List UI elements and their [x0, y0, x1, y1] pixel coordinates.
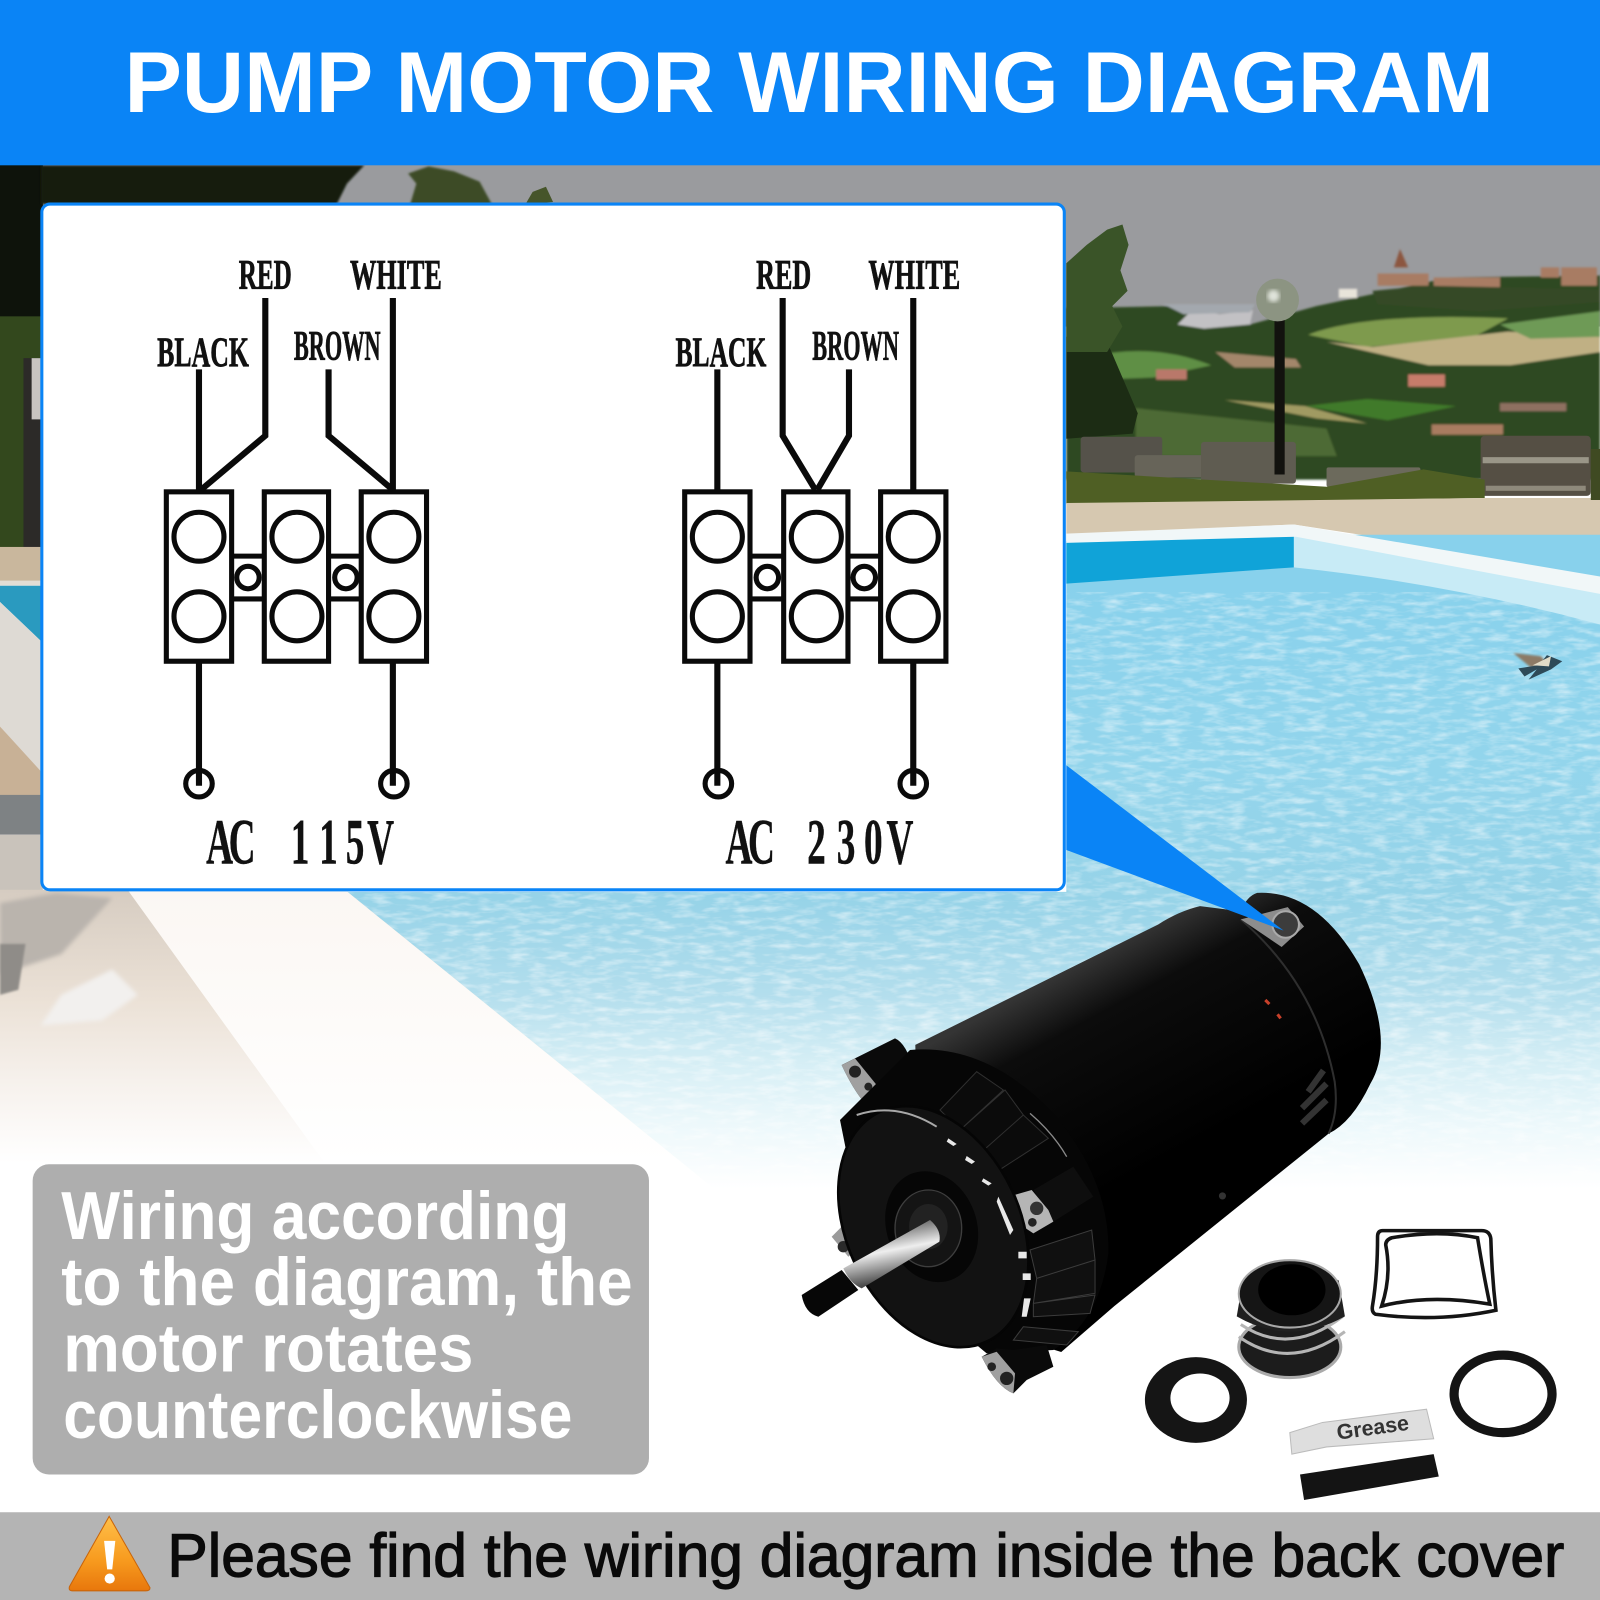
diagram: AC 115V: WHITE	[350, 253, 442, 299]
footer bar	[0, 1512, 1600, 1600]
callout wedge	[1066, 765, 1284, 931]
shaft seal	[1237, 1260, 1345, 1378]
grease tube: Grease	[1335, 1411, 1410, 1445]
diagram: AC 115V	[157, 253, 442, 878]
pool wall and coping	[1066, 524, 1600, 624]
left seal ring	[1145, 1357, 1247, 1443]
motor body	[915, 893, 1381, 1352]
pool water	[345, 535, 1600, 1194]
end cap seam	[1241, 919, 1336, 1134]
right tree	[1066, 224, 1138, 439]
under-panel deck	[0, 890, 720, 1194]
planters	[1081, 436, 1591, 496]
diagram: AC 230V: RED	[756, 253, 811, 299]
diagram: AC 230V	[676, 253, 960, 878]
diagram: AC 230V: AC 230V	[726, 807, 913, 878]
pump motor photo	[801, 893, 1381, 1393]
callout: rotation note	[33, 1164, 649, 1474]
callout: rotation note: to the diagram, the	[61, 1245, 633, 1320]
black bar	[1300, 1454, 1439, 1500]
cooling fins	[940, 1072, 1095, 1345]
background: pool scene	[0, 165, 1600, 1160]
grease tube	[1290, 1409, 1434, 1454]
distant hills and fields	[1066, 249, 1600, 480]
front end of motor	[801, 1038, 1108, 1393]
callout: rotation note: counterclockwise	[63, 1378, 572, 1453]
callout: rotation note: Wiring according	[61, 1179, 569, 1254]
lawn strip	[1066, 469, 1485, 504]
footer text: Please find the wiring diagram inside the back cover	[167, 1522, 1564, 1590]
side ear	[1008, 1167, 1093, 1233]
flange	[840, 1049, 1108, 1353]
lamp post	[1256, 279, 1299, 474]
right gasket	[1454, 1355, 1552, 1433]
header banner	[0, 0, 1600, 165]
icon: warning triangle	[69, 1516, 150, 1591]
callout: rotation note: motor rotates	[63, 1311, 473, 1386]
front disc	[801, 1075, 1065, 1378]
shaft	[802, 1220, 940, 1317]
bottom ear	[982, 1345, 1053, 1393]
body screw	[1219, 1192, 1226, 1199]
sky	[0, 163, 1600, 327]
diagram: AC 230V: BLACK	[676, 330, 767, 376]
diagram: AC 115V: BLACK	[157, 330, 249, 376]
diagram: AC 115V: RED	[239, 253, 292, 299]
bird	[1513, 653, 1562, 680]
left ear	[832, 1225, 858, 1257]
diagram: AC 230V: WHITE	[868, 253, 960, 299]
panel: wiring diagrams	[42, 204, 1064, 890]
square o-rings	[1372, 1231, 1496, 1318]
seal kit	[1145, 1231, 1552, 1500]
terminal port	[1241, 907, 1304, 947]
diagram: AC 115V: BROWN	[294, 324, 381, 370]
left trees and lawn	[0, 163, 553, 552]
left deck and pool corner	[0, 547, 43, 892]
indicator glints	[1265, 1000, 1281, 1018]
right deck	[1066, 498, 1600, 571]
diagram: AC 230V: BROWN	[812, 324, 899, 370]
diagram: AC 115V: AC 115V	[206, 807, 394, 878]
vent slots	[1302, 1070, 1327, 1123]
title: PUMP MOTOR WIRING DIAGRAM	[124, 34, 1494, 131]
top ear	[842, 1038, 917, 1103]
